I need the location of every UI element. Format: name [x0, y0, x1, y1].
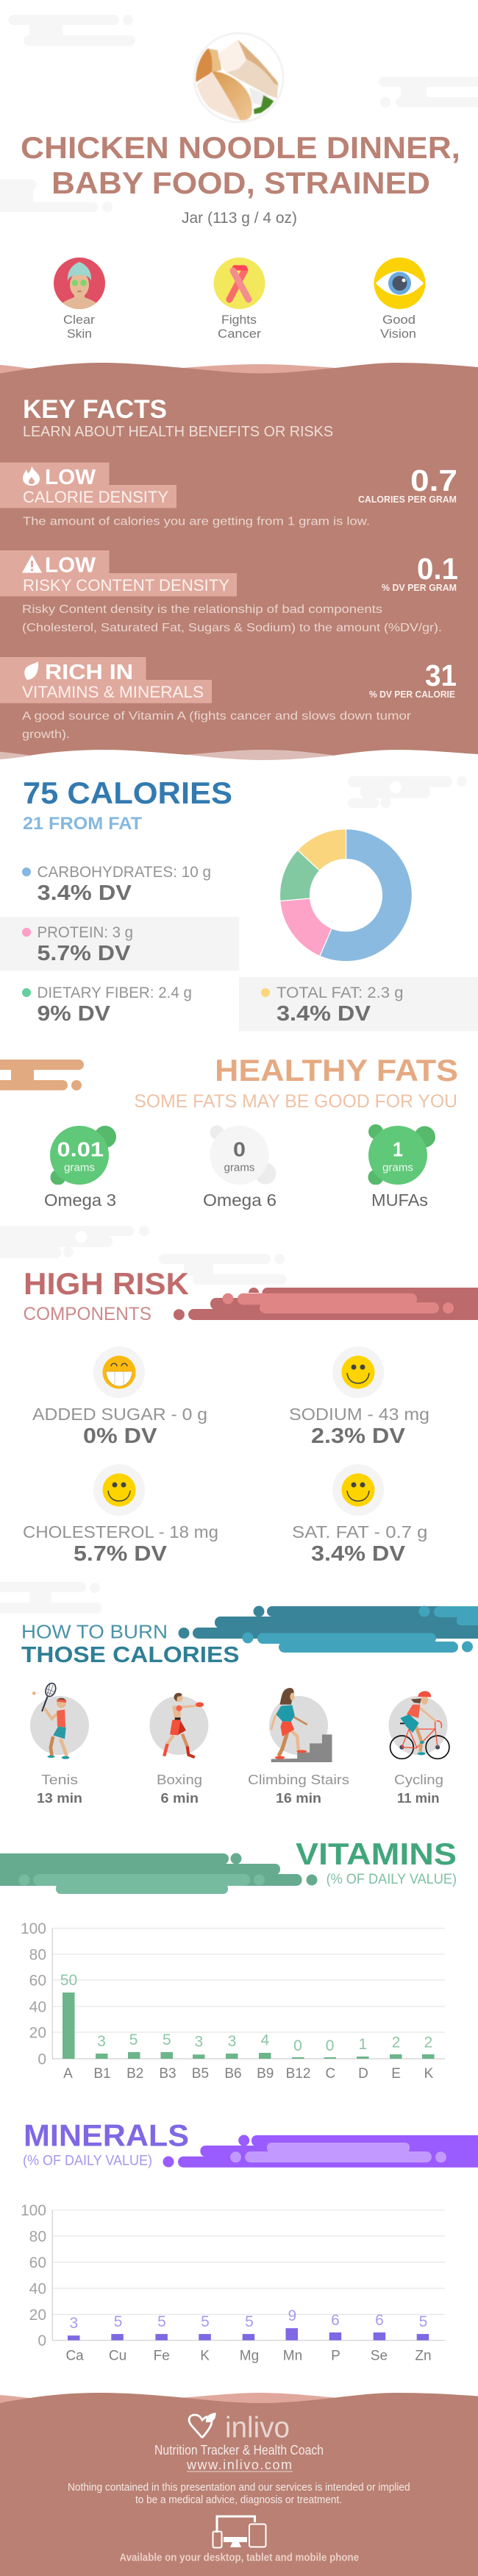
decoration: high risk band	[174, 1288, 478, 1320]
disclaimer: Nothing contained in this presentation and our services is intended or implied	[68, 2482, 410, 2494]
availability note: Available on your desktop, tablet and mobile phone	[119, 2552, 359, 2564]
bar chart: vitamins: B5	[192, 2066, 209, 2082]
panel: key facts	[0, 363, 478, 760]
exercise: tennis: Tenis	[41, 1773, 78, 1787]
bar chart: vitamins: B2	[126, 2066, 143, 2082]
bar chart: vitamins: 3	[194, 2034, 203, 2051]
vitamins heading: VITAMINS	[296, 1837, 457, 1871]
background clouds: top	[0, 15, 478, 212]
bar chart: vitamins: 0	[293, 2037, 302, 2054]
exercise: climbing stairs: 16 min	[276, 1791, 321, 1806]
bar chart: minerals: Fe	[154, 2349, 170, 2364]
background clouds: high risk	[0, 1226, 287, 1285]
risk: added sugar: 0% DV	[83, 1424, 157, 1448]
background cloud: calories	[348, 776, 467, 808]
benefit: good vision: Good	[382, 313, 415, 327]
fact: risky content density: % DV PER GRAM	[382, 583, 457, 593]
logo: inlivo	[189, 2411, 290, 2444]
bar chart: vitamins: A	[63, 2066, 73, 2082]
exercise: cycling: Cycling	[394, 1773, 443, 1787]
stat: omega 6	[203, 1126, 277, 1210]
bar chart: vitamins: E	[391, 2066, 401, 2082]
bar chart: vitamins: 2	[392, 2034, 400, 2051]
fact: rich in vitamins and minerals: RICH IN	[45, 661, 133, 684]
bar chart: minerals: 5	[419, 2313, 427, 2330]
fact: rich in vitamins and minerals: VITAMINS & MINERALS	[22, 683, 204, 701]
risk: saturated fat	[292, 1464, 428, 1566]
risk: saturated fat: 3.4% DV	[311, 1542, 406, 1566]
burn calories heading: THOSE CALORIES	[21, 1642, 240, 1667]
stat: omega 6: 0	[233, 1138, 246, 1161]
benefit: good vision: Vision	[380, 327, 416, 341]
exercise: cycling	[388, 1691, 449, 1806]
fact: risky content density: (Cholesterol, Saturated Fat, Sugars & Sodium) to the amount (%DV/gr).	[22, 622, 442, 634]
bar chart: minerals: 100	[21, 2202, 46, 2219]
exercise: cycling: 11 min	[397, 1791, 440, 1806]
risk: added sugar	[32, 1346, 207, 1448]
bar chart: minerals	[21, 2202, 445, 2364]
bar chart: vitamins: 1	[359, 2036, 367, 2053]
exercise: tennis	[30, 1682, 89, 1806]
fact: risky content density: LOW	[45, 554, 96, 578]
fact: calorie density: LOW	[45, 466, 96, 489]
bar chart: vitamins: 80	[29, 1947, 46, 1963]
legend: protein	[0, 917, 240, 971]
fact: rich in vitamins and minerals	[0, 657, 457, 741]
bar chart: vitamins: 5	[129, 2032, 138, 2048]
bar chart: vitamins: 3	[97, 2033, 106, 2050]
stat: omega 6: Omega 6	[203, 1191, 277, 1210]
logo: inlivo: inlivo	[225, 2411, 290, 2444]
bar chart: vitamins: B9	[257, 2066, 274, 2082]
bar chart: vitamins: B6	[224, 2066, 242, 2082]
bar chart: minerals: P	[331, 2349, 340, 2364]
legend: total fat: TOTAL FAT: 2.3 g	[277, 984, 403, 1001]
bar chart: minerals: Mn	[283, 2349, 302, 2364]
bar chart: minerals: Mg	[240, 2349, 259, 2364]
exercise: tennis: 13 min	[37, 1791, 82, 1806]
fact: rich in vitamins and minerals: A good source of Vitamin A (fights cancer and slows down tumor	[22, 710, 412, 723]
fact: risky content density: 0.1	[417, 552, 458, 586]
healthy fats heading: HEALTHY FATS	[215, 1053, 458, 1087]
bar chart: minerals: 5	[201, 2313, 210, 2330]
stat: MUFAs: MUFAs	[371, 1191, 428, 1210]
title: CHICKEN NOODLE DINNER,	[21, 130, 460, 165]
exercise: boxing: Boxing	[157, 1773, 202, 1787]
risk: saturated fat: SAT. FAT - 0.7 g	[292, 1522, 428, 1541]
risk: cholesterol: CHOLESTEROL - 18 mg	[23, 1522, 218, 1541]
decoration: burn calories band	[178, 1605, 478, 1653]
bar chart: minerals: 3	[69, 2315, 78, 2332]
bar chart: vitamins: 2	[424, 2034, 432, 2051]
bar chart: minerals: 5	[114, 2313, 122, 2330]
bar chart: minerals: 9	[288, 2307, 296, 2324]
vitamins subheading: (% OF DAILY VALUE)	[327, 1872, 457, 1887]
fact: risky content density: RISKY CONTENT DENSITY	[23, 576, 229, 595]
bar chart: minerals: Ca	[65, 2349, 84, 2364]
decoration: healthy fats band	[0, 1060, 84, 1090]
exercise: climbing stairs	[248, 1688, 349, 1806]
bar chart: vitamins: B12	[286, 2066, 310, 2082]
bar chart: minerals: 6	[375, 2312, 384, 2329]
exercise: boxing	[149, 1693, 208, 1806]
bar chart: minerals: 80	[29, 2228, 46, 2246]
bar chart: vitamins: B3	[159, 2066, 176, 2082]
fact: risky content density: Risky Content density is the relationship of bad components	[22, 603, 382, 616]
risk: sodium: 2.3% DV	[311, 1424, 406, 1448]
website: www.inlivo.com	[186, 2458, 292, 2472]
fact: risky content density	[0, 550, 458, 634]
stat: omega 3: 0.01	[57, 1138, 104, 1161]
legend: protein: PROTEIN: 3 g	[37, 924, 133, 941]
benefit: fights cancer	[213, 258, 265, 341]
decoration: minerals band	[163, 2135, 478, 2168]
bar chart: minerals: Se	[371, 2349, 388, 2364]
benefit: fights cancer: Fights	[221, 313, 257, 327]
title: BABY FOOD, STRAINED	[51, 166, 430, 200]
bar chart: vitamins: 40	[29, 1998, 46, 2016]
legend: dietary fiber: 9% DV	[37, 1002, 111, 1026]
key facts subheading: LEARN ABOUT HEALTH BENEFITS OR RISKS	[23, 424, 333, 440]
bar chart: vitamins: 100	[21, 1920, 46, 1937]
bar chart: minerals: 5	[157, 2313, 166, 2330]
bar chart: vitamins: 4	[260, 2032, 269, 2049]
risk: cholesterol: 5.7% DV	[74, 1542, 168, 1566]
healthy fats subheading: SOME FATS MAY BE GOOD FOR YOU	[134, 1091, 457, 1112]
exercise: climbing stairs: Climbing Stairs	[248, 1773, 349, 1787]
minerals subheading: (% OF DAILY VALUE)	[23, 2154, 152, 2169]
stat: MUFAs	[368, 1124, 435, 1210]
bar chart: vitamins: K	[424, 2066, 434, 2082]
benefit: fights cancer: Cancer	[218, 327, 262, 341]
legend: protein: 5.7% DV	[37, 942, 131, 965]
risk: added sugar: ADDED SUGAR - 0 g	[32, 1405, 207, 1424]
burn calories heading	[21, 1620, 240, 1667]
fact: calorie density	[0, 462, 457, 528]
disclaimer	[68, 2482, 410, 2506]
high risk subheading: COMPONENTS	[24, 1304, 151, 1324]
calories from fat: 21 FROM FAT	[23, 814, 142, 834]
exercise: boxing: 6 min	[160, 1791, 199, 1806]
bar chart: vitamins: B1	[93, 2066, 111, 2082]
calories heading: 75 CALORIES	[23, 776, 232, 810]
icon: devices	[213, 2516, 266, 2547]
legend: carbohydrates: CARBOHYDRATES: 10 g	[37, 864, 211, 881]
bar chart: minerals: 40	[29, 2281, 46, 2297]
risk: sodium: SODIUM - 43 mg	[289, 1405, 429, 1424]
bar chart: vitamins: 20	[29, 2025, 46, 2041]
bar chart: vitamins: 0	[326, 2037, 334, 2054]
fact: rich in vitamins and minerals: growth).	[22, 728, 70, 741]
serving size: Jar (113 g / 4 oz)	[182, 210, 297, 227]
fact: calorie density: The amount of calories you are getting from 1 gram is low.	[23, 515, 370, 528]
decoration: vitamins band	[0, 1853, 318, 1894]
fact: calorie density: CALORIES PER GRAM	[358, 494, 457, 505]
fact: calorie density: 0.7	[410, 464, 457, 497]
stat: MUFAs: 1	[393, 1138, 403, 1161]
background cloud: burn calories	[0, 1582, 101, 1614]
bar chart: vitamins: C	[326, 2066, 335, 2082]
legend: total fat	[239, 977, 478, 1032]
title	[21, 130, 460, 200]
stat: MUFAs: grams	[382, 1162, 413, 1174]
stat: omega 3	[44, 1126, 116, 1210]
bar chart: vitamins	[21, 1920, 445, 2082]
fact: rich in vitamins and minerals: 31	[425, 659, 457, 692]
stat: omega 3: grams	[64, 1162, 95, 1174]
donut chart: macronutrients	[279, 829, 412, 962]
bar chart: vitamins: 50	[60, 1972, 77, 1989]
bar chart: minerals: Cu	[109, 2349, 126, 2364]
key facts heading: KEY FACTS	[23, 395, 167, 424]
tagline: Nutrition Tracker & Health Coach	[154, 2443, 324, 2458]
legend: dietary fiber: DIETARY FIBER: 2.4 g	[37, 984, 192, 1001]
legend: total fat: 3.4% DV	[277, 1002, 371, 1026]
bar chart: minerals: 20	[29, 2307, 46, 2324]
bar chart: minerals: 0	[38, 2332, 46, 2349]
stat: omega 6: grams	[224, 1162, 254, 1174]
fact: rich in vitamins and minerals: % DV PER CALORIE	[369, 689, 455, 700]
benefit: good vision	[374, 258, 425, 341]
legend: carbohydrates: 3.4% DV	[37, 881, 132, 905]
risk: cholesterol	[23, 1464, 218, 1566]
bar chart: vitamins: 0	[38, 2051, 46, 2068]
bar chart: minerals: K	[200, 2349, 210, 2364]
bar chart: minerals: 6	[331, 2312, 340, 2329]
panel: footer	[0, 2393, 478, 2576]
fact: calorie density: CALORIE DENSITY	[23, 488, 168, 506]
bar chart: minerals: 5	[245, 2313, 254, 2330]
minerals heading: MINERALS	[24, 2118, 189, 2153]
bar chart: vitamins: 5	[163, 2032, 171, 2048]
legend: carbohydrates	[22, 864, 211, 905]
burn calories heading: HOW TO BURN	[21, 1620, 168, 1642]
food image: chicken	[194, 33, 283, 122]
stat: omega 3: Omega 3	[44, 1191, 116, 1210]
bar chart: vitamins: 3	[228, 2033, 236, 2050]
bar chart: vitamins: 60	[29, 1972, 46, 1990]
risk: sodium	[289, 1346, 429, 1448]
bar chart: minerals: 60	[29, 2254, 46, 2271]
legend: dietary fiber	[22, 984, 192, 1026]
disclaimer: to be a medical advice, diagnosis or treatment.	[135, 2494, 342, 2506]
high risk heading: HIGH RISK	[24, 1266, 189, 1301]
benefit: clear skin	[54, 258, 105, 341]
bar chart: minerals: Zn	[415, 2349, 432, 2364]
benefit: clear skin: Skin	[67, 327, 92, 341]
bar chart: vitamins: D	[358, 2066, 368, 2082]
benefit: clear skin: Clear	[63, 313, 96, 327]
